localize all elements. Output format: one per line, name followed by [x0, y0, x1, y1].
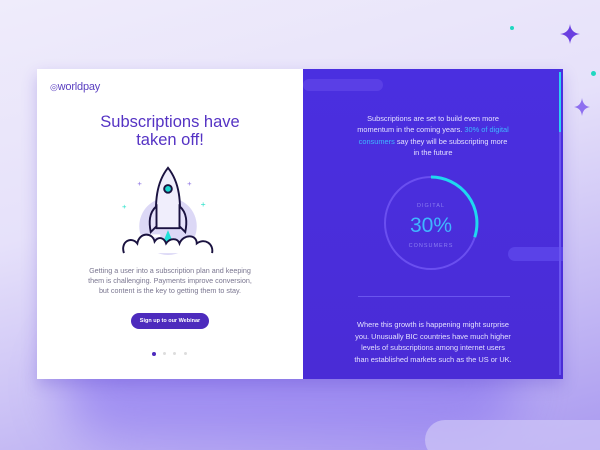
panel: right stats	[303, 69, 563, 379]
intro text: momentum in the coming years. 30% of digital	[357, 125, 509, 134]
title: taken off!	[136, 131, 204, 149]
dots	[510, 26, 514, 30]
donut chart	[384, 176, 478, 270]
title	[100, 113, 240, 149]
icon: rocket: +	[201, 199, 206, 209]
icon: rocket: +	[122, 202, 127, 211]
background cloud right	[425, 420, 600, 450]
intro text	[357, 114, 509, 157]
bottom text	[354, 320, 512, 364]
intro text: Subscriptions are set to build even more	[367, 114, 499, 123]
body text: but content is the key to getting them to stay.	[99, 286, 241, 295]
decorative clouds	[303, 79, 383, 91]
pagination dots	[152, 352, 187, 356]
icon: rocket: +	[137, 179, 142, 188]
donut chart: CONSUMERS	[409, 243, 453, 249]
donut chart: 30%	[410, 214, 452, 237]
panel: left intro	[37, 69, 303, 379]
divider	[358, 296, 510, 297]
sparkle big	[560, 24, 580, 44]
body text: them is challenging. Payments improve conversion,	[88, 276, 252, 285]
scrollbar	[559, 72, 561, 375]
bottom text: than established markets such as the US or UK.	[354, 354, 512, 364]
title: Subscriptions have	[100, 113, 240, 131]
button	[131, 313, 209, 329]
icon: rocket	[122, 166, 214, 255]
sparkle small	[574, 98, 590, 116]
logo: ◎worldpay	[50, 81, 100, 93]
bottom text: Where this growth is happening might surprise	[357, 320, 509, 329]
icon: rocket: +	[187, 179, 192, 188]
bottom text: levels of subscriptions among internet users	[361, 343, 505, 352]
bottom text: you. Unusually BIC countries have much higher	[355, 332, 511, 340]
button: Sign up to our Webinar	[140, 318, 200, 324]
body text: Getting a user into a subscription plan and keeping	[89, 266, 251, 275]
card shadow	[37, 69, 563, 379]
intro text: consumers say they will be subscripting more	[359, 137, 507, 146]
background glow	[60, 330, 520, 440]
body text	[88, 266, 252, 295]
intro text: in the future	[413, 148, 453, 157]
donut chart: DIGITAL	[417, 203, 445, 209]
